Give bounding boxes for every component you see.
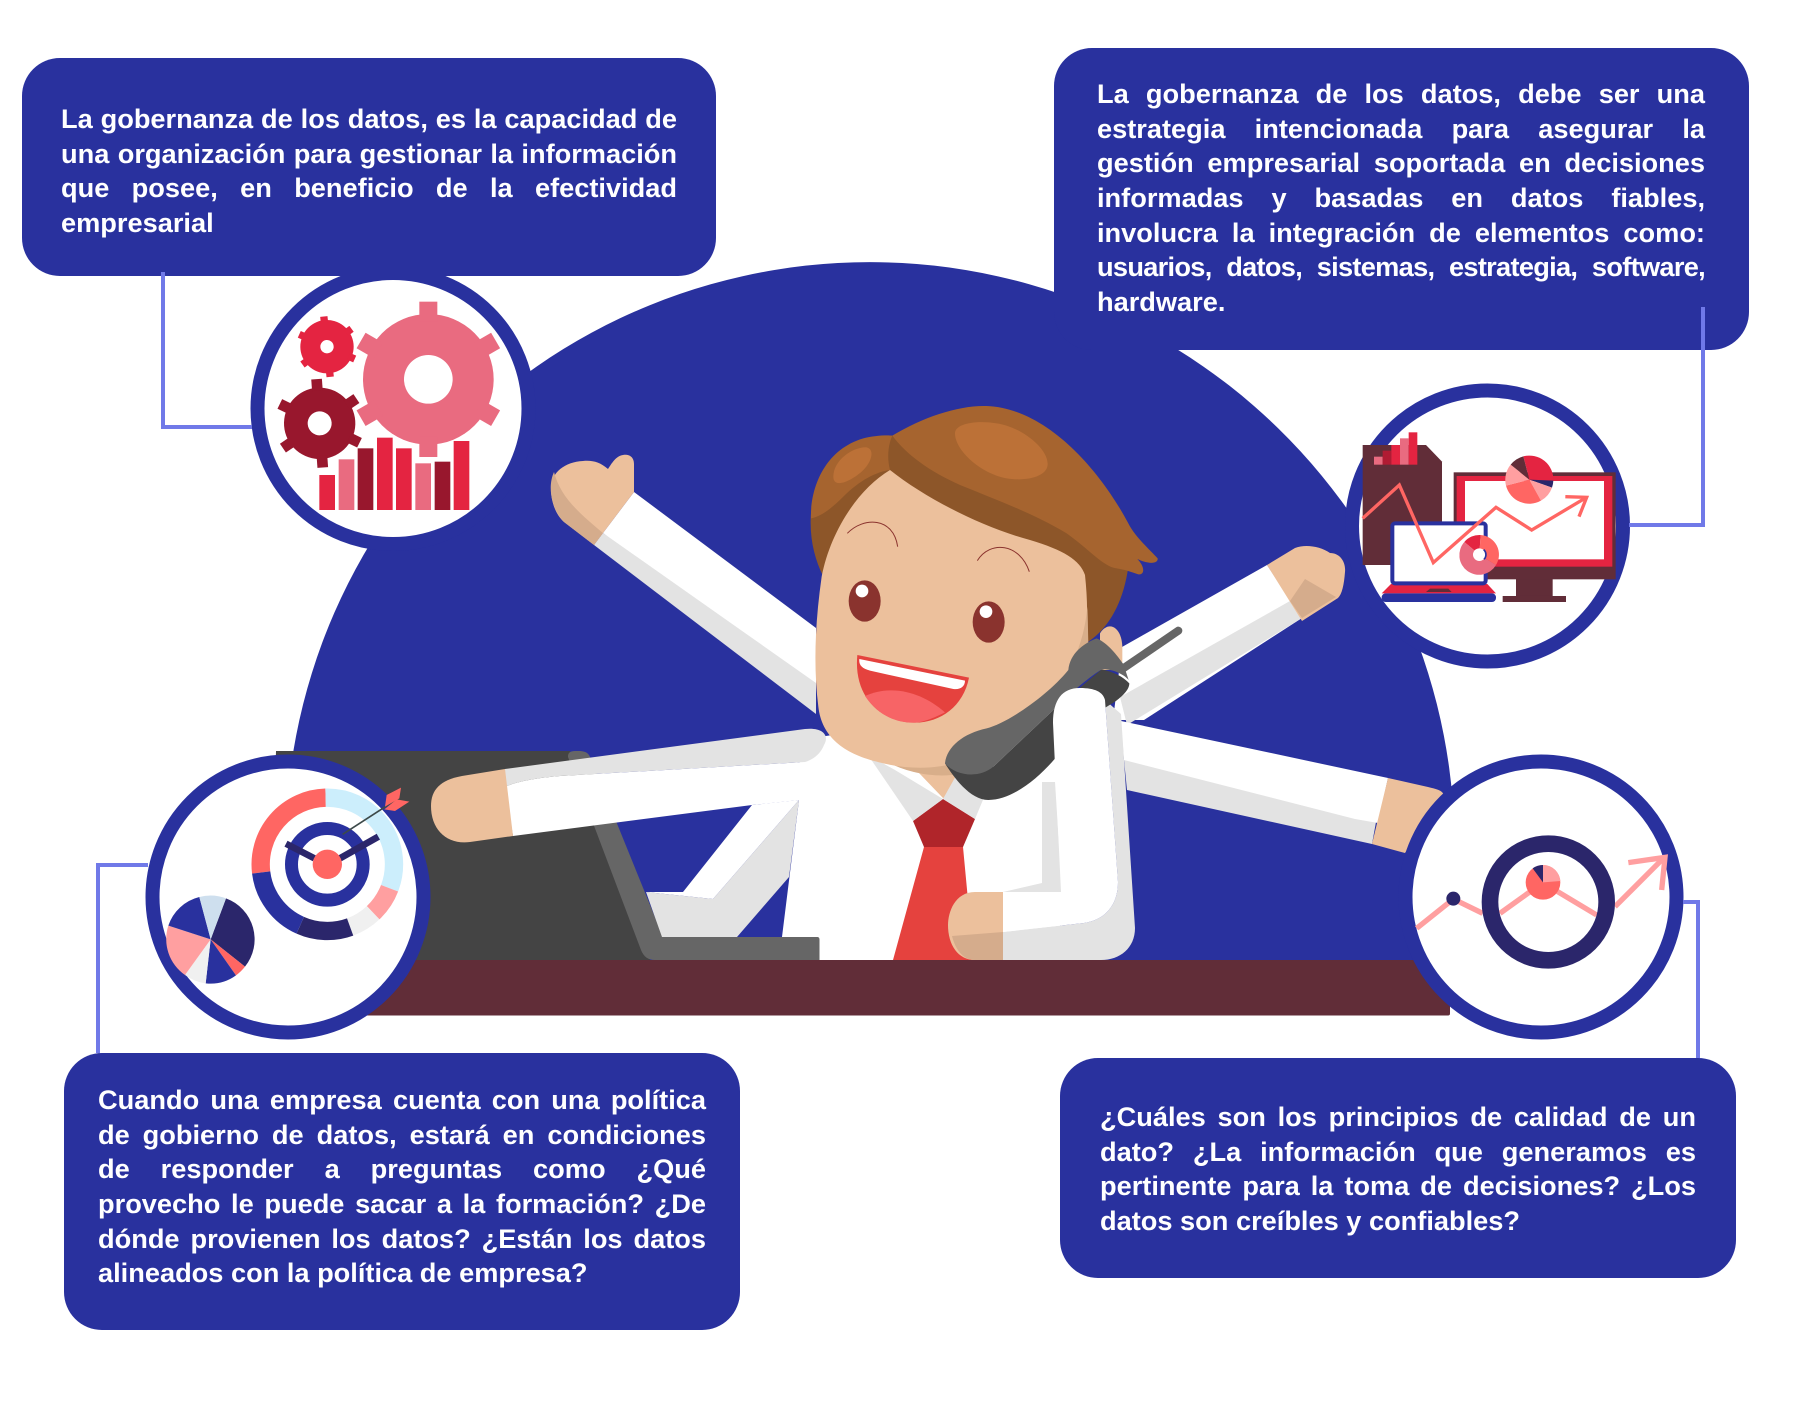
text box: top right bbox=[1054, 48, 1749, 350]
chin shadow bbox=[893, 757, 970, 775]
text: definition: empresarial bbox=[61, 207, 214, 238]
hair main bbox=[892, 406, 1158, 574]
text: policy questions: dónde provienen los datos? ¿Están los datos bbox=[98, 1223, 706, 1254]
hair highlights bbox=[833, 422, 1048, 483]
text box: bottom left bbox=[64, 1053, 740, 1330]
target arms bbox=[286, 837, 378, 858]
circle: gears and bars bbox=[258, 273, 528, 544]
cheek shadow bbox=[1073, 607, 1088, 660]
text: definition: una organización para gestionar la información bbox=[61, 138, 677, 169]
text box: bottom right bbox=[1060, 1058, 1736, 1278]
face bbox=[815, 470, 1087, 768]
text: policy questions: Cuando una empresa cuenta con una política bbox=[98, 1084, 706, 1115]
antenna bbox=[1123, 631, 1178, 668]
folder bbox=[1363, 445, 1442, 565]
desk bbox=[340, 960, 1450, 1016]
red gear bbox=[296, 314, 358, 380]
text: strategy: La gobernanza de los datos, debe ser una bbox=[1097, 78, 1705, 109]
pie chart bbox=[1505, 456, 1553, 504]
eyebrows bbox=[847, 522, 1029, 572]
text: strategy: gestión empresarial soportada en decisiones bbox=[1097, 147, 1705, 178]
bar chart bbox=[319, 438, 469, 510]
torso and shirt bbox=[646, 700, 1062, 960]
text: strategy bbox=[1097, 78, 1706, 317]
text box: top left bbox=[22, 58, 716, 276]
text: quality questions: pertinente para la toma de decisiones? ¿Los bbox=[1100, 1170, 1696, 1201]
circle: target and pie bbox=[152, 762, 424, 1032]
text: strategy: hardware. bbox=[1097, 286, 1225, 317]
text: policy questions: de gobierno de datos, estará en condiciones bbox=[98, 1119, 706, 1150]
neck bbox=[903, 757, 967, 798]
target outer ring bbox=[261, 798, 394, 931]
laptop base bbox=[655, 937, 820, 960]
point bbox=[1446, 892, 1460, 906]
monitor bbox=[1454, 472, 1616, 602]
raised left arm bbox=[551, 455, 816, 714]
hand arm over phone bbox=[1003, 688, 1118, 932]
text: policy questions: de responder a preguntas como ¿Qué bbox=[98, 1153, 706, 1184]
navy ring bbox=[1490, 844, 1607, 960]
circle: computers and charts bbox=[1352, 390, 1623, 662]
text: definition: que posee, en beneficio de la efectividad bbox=[61, 172, 677, 203]
target inner ring bbox=[291, 828, 363, 900]
bullseye bbox=[313, 850, 342, 879]
text: quality questions bbox=[1100, 1101, 1696, 1236]
circle: trend line bbox=[1406, 762, 1676, 1032]
text: policy questions: alineados con la política de empresa? bbox=[98, 1257, 588, 1288]
mouth bbox=[857, 655, 969, 723]
trend line bbox=[1417, 857, 1665, 928]
pie bbox=[1526, 865, 1560, 900]
dark gear bbox=[276, 376, 364, 470]
raised right arm bbox=[1113, 546, 1345, 725]
text: strategy: usuarios, datos, sistemas, estrategia, software, bbox=[1097, 251, 1705, 282]
trend line with arrow bbox=[1363, 485, 1587, 563]
text: quality questions: ¿Cuáles son los principios de calidad de un bbox=[1100, 1101, 1696, 1132]
hair left lobe bbox=[811, 435, 892, 518]
tie bbox=[893, 799, 975, 960]
pie chart bbox=[166, 896, 255, 984]
text: policy questions: provecho le puede sacar a la formación? ¿De bbox=[98, 1188, 706, 1219]
eyes bbox=[849, 580, 1005, 643]
hair dark layer bbox=[811, 436, 1128, 642]
text: policy questions bbox=[98, 1084, 706, 1288]
ear bbox=[1100, 626, 1122, 670]
text: strategy: involucra la integración de elementos como: bbox=[1097, 217, 1705, 248]
text: strategy: estrategia intencionada para asegurar la bbox=[1097, 113, 1705, 144]
big gear bbox=[357, 302, 500, 457]
head with hair and phone bbox=[811, 406, 1178, 800]
text: quality questions: datos son creíbles y confiables? bbox=[1100, 1205, 1520, 1236]
right arm holding phone area bbox=[948, 700, 1135, 960]
donut chart bbox=[1459, 535, 1499, 575]
lower right arm bbox=[1121, 721, 1444, 853]
text: quality questions: dato? ¿La información que generamos es bbox=[1100, 1136, 1696, 1167]
left arm on laptop bbox=[431, 729, 826, 842]
mini bars bbox=[1374, 432, 1417, 465]
arrow bbox=[343, 788, 409, 834]
laptop behind the man bbox=[270, 751, 740, 960]
text: definition bbox=[61, 103, 677, 238]
text: strategy: informadas y basadas en datos fiables, bbox=[1097, 182, 1705, 213]
blue dome background bbox=[286, 262, 1454, 960]
phone bbox=[945, 638, 1129, 800]
laptop bbox=[1382, 523, 1496, 602]
text: definition: La gobernanza de los datos, es la capacidad de bbox=[61, 103, 677, 134]
collar bbox=[868, 755, 985, 821]
